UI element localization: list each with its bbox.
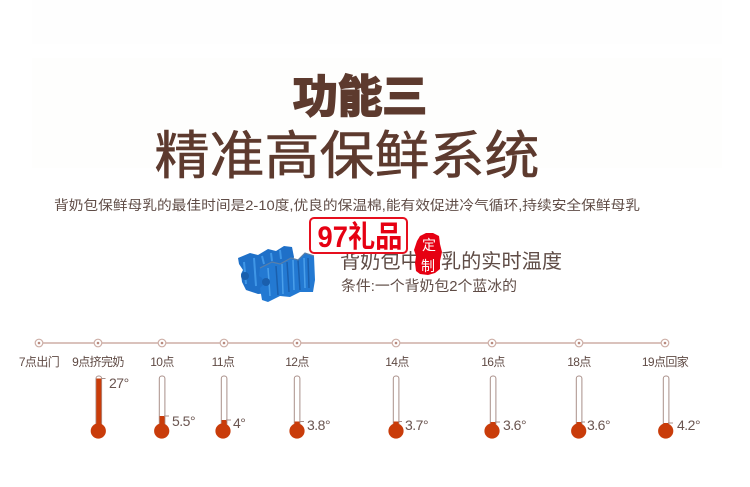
watermark: 97 gift label: 97礼品	[318, 221, 402, 254]
subheading: real-time temperature: 背奶包中母乳的实时温度	[340, 250, 562, 273]
watermark: custom red seal	[414, 233, 442, 275]
heading: precise freshness system: 精准高保鲜系统	[154, 128, 540, 186]
timeline labels: 7点出门	[19, 354, 59, 369]
thermometer: 11 o'clock 4 degrees: 4°	[233, 415, 245, 431]
thermometer: 10 o'clock 5.5 degrees	[154, 376, 195, 439]
timeline labels: 11点	[212, 355, 235, 369]
thermometer: 14 o'clock 3.7 degrees	[388, 376, 428, 439]
thermometer: 12 o'clock 3.8 degrees: 3.8°	[307, 417, 330, 433]
thermometer: 19 o'clock 4.2 degrees: 4.2°	[677, 417, 700, 433]
thermometer: 9 o'clock 27 degrees	[91, 375, 129, 439]
timeline labels: 9点挤完奶	[72, 354, 124, 369]
description text: 背奶包保鲜母乳的最佳时间是2-10度,优良的保温棉,能有效促进冷气循环,持续安全保鲜母乳	[54, 197, 640, 213]
thermometer: 18 o'clock 3.6 degrees: 3.6°	[587, 417, 610, 433]
thermometer: 16 o'clock 3.6 degrees	[484, 376, 526, 439]
thermometer: 9 o'clock 27 degrees: 27°	[109, 375, 129, 391]
thermometer: 16 o'clock 3.6 degrees: 3.6°	[503, 417, 526, 433]
thermometer: 14 o'clock 3.7 degrees: 3.7°	[405, 417, 428, 433]
thermometer: 18 o'clock 3.6 degrees	[571, 376, 610, 439]
timeline labels: 18点	[567, 355, 591, 369]
timeline labels	[19, 354, 689, 369]
thermometer: 10 o'clock 5.5 degrees: 5.5°	[172, 413, 195, 429]
timeline labels: 10点	[150, 355, 174, 369]
timeline	[35, 339, 669, 347]
thermometer: 11 o'clock 4 degrees	[215, 376, 245, 439]
timeline labels: 14点	[385, 355, 409, 369]
thermometer: 19 o'clock 4.2 degrees	[658, 376, 700, 439]
watermark: custom red seal: 定	[422, 237, 436, 253]
timeline labels: 12点	[285, 355, 309, 369]
watermark: custom red seal: 制	[421, 258, 435, 274]
icon: blue ice packs	[238, 246, 315, 302]
title: feature three: 功能三	[293, 73, 427, 122]
timeline labels: 16点	[481, 355, 505, 369]
timeline labels: 19点回家	[642, 354, 689, 369]
thermometer: 12 o'clock 3.8 degrees	[289, 376, 330, 439]
condition note: 条件:一个背奶包2个蓝冰的	[341, 278, 517, 295]
